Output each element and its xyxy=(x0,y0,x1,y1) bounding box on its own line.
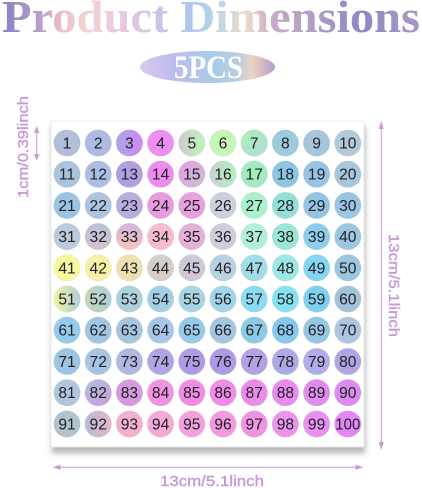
row 6: 56 xyxy=(214,292,232,308)
sticker diameter dimension: 1cm/0.39linch xyxy=(15,96,32,198)
row 7: 65 xyxy=(183,323,201,340)
row 10: 98 xyxy=(277,416,294,434)
row 3: 21 xyxy=(58,198,76,215)
row 5: 48 xyxy=(277,260,294,277)
row 9: 83 xyxy=(121,385,138,402)
row 9: 84 xyxy=(152,385,170,402)
row 2: 20 xyxy=(339,167,357,184)
row 3: 27 xyxy=(246,198,263,215)
row 7: 66 xyxy=(214,323,232,340)
row 2: 19 xyxy=(308,167,325,184)
row 4: 31 xyxy=(58,229,76,246)
row 4: 39 xyxy=(308,229,325,246)
row 3: 28 xyxy=(277,198,294,215)
row 6: 59 xyxy=(308,292,325,308)
row 8: 73 xyxy=(121,354,138,371)
row 1: 8 xyxy=(281,136,290,152)
row 3: 29 xyxy=(308,198,325,215)
row 6: 57 xyxy=(246,292,263,308)
row 8: 80 xyxy=(339,354,357,371)
row 4: 37 xyxy=(246,229,263,246)
row 5: 50 xyxy=(339,260,357,277)
row 9: 90 xyxy=(339,385,357,402)
row 6: 55 xyxy=(183,292,201,308)
row 4: 34 xyxy=(152,229,170,246)
row 2: 11 xyxy=(59,167,75,184)
row 7: 63 xyxy=(121,323,138,340)
row 5: 41 xyxy=(58,260,76,277)
row 8: 76 xyxy=(214,354,232,371)
row 8: 75 xyxy=(183,354,201,371)
row 9: 82 xyxy=(90,385,107,402)
row 10: 94 xyxy=(152,416,170,434)
row 6: 60 xyxy=(339,292,357,308)
row 10: 96 xyxy=(214,416,232,434)
row 5: 43 xyxy=(121,260,138,277)
row 2: 13 xyxy=(121,167,138,184)
row 8 xyxy=(54,348,361,375)
row 7: 61 xyxy=(58,323,76,340)
row 8: 79 xyxy=(308,354,325,371)
row 3: 22 xyxy=(90,198,107,215)
number stickers grid xyxy=(54,130,361,437)
row 6: 58 xyxy=(277,292,294,308)
row 2: 18 xyxy=(277,167,294,184)
row 1: 6 xyxy=(219,136,227,152)
row 8: 71 xyxy=(58,354,76,371)
row 10: 95 xyxy=(183,416,201,434)
row 2: 15 xyxy=(183,167,201,184)
height dimension xyxy=(379,121,402,450)
row 7: 68 xyxy=(277,323,294,340)
height dimension: 13cm/5.1linch xyxy=(385,234,402,337)
row 5 xyxy=(54,254,361,281)
row 10: 93 xyxy=(121,416,138,434)
row 8: 74 xyxy=(152,354,170,371)
row 5: 49 xyxy=(308,260,325,277)
row 3: 30 xyxy=(339,198,357,215)
row 4 xyxy=(54,223,361,250)
row 1: 1 xyxy=(63,136,71,152)
row 3: 24 xyxy=(152,198,170,215)
row 4: 32 xyxy=(90,229,107,246)
row 8: 78 xyxy=(277,354,294,371)
quantity badge: 5PCS xyxy=(140,50,275,86)
row 2 xyxy=(54,161,361,188)
row 1 xyxy=(54,130,361,156)
row 7: 69 xyxy=(308,323,325,340)
row 6: 54 xyxy=(152,292,170,308)
row 9: 81 xyxy=(58,385,76,402)
row 1: 7 xyxy=(250,136,259,152)
row 5: 46 xyxy=(214,260,232,277)
row 5: 45 xyxy=(183,260,201,277)
row 1: 10 xyxy=(339,136,357,152)
row 7: 62 xyxy=(90,323,107,340)
row 9: 85 xyxy=(183,385,201,402)
row 5: 47 xyxy=(246,260,263,277)
width dimension xyxy=(52,465,364,488)
row 8: 77 xyxy=(246,354,263,371)
row 2: 17 xyxy=(246,167,263,184)
row 8: 72 xyxy=(90,354,107,371)
row 4: 35 xyxy=(183,229,201,246)
quantity badge: 5PCS: 5PCS xyxy=(174,50,243,86)
row 3 xyxy=(54,192,361,219)
row 1: 9 xyxy=(312,136,321,152)
row 4: 40 xyxy=(339,229,357,246)
row 5: 44 xyxy=(152,260,170,277)
row 7: 70 xyxy=(339,323,357,340)
row 9: 86 xyxy=(214,385,232,402)
sticker diameter dimension xyxy=(15,96,39,198)
row 10: 100 xyxy=(335,416,361,434)
row 10 xyxy=(54,411,361,437)
row 1: 2 xyxy=(94,136,103,152)
sticker sheet xyxy=(51,121,364,447)
row 4: 36 xyxy=(214,229,232,246)
row 9: 87 xyxy=(246,385,263,402)
row 2: 12 xyxy=(90,167,107,184)
row 6: 53 xyxy=(121,292,138,308)
row 5: 42 xyxy=(90,260,107,277)
row 6: 51 xyxy=(58,292,76,308)
row 10: 91 xyxy=(58,416,76,434)
row 7: 64 xyxy=(152,323,170,340)
row 9: 89 xyxy=(308,385,325,402)
row 2: 14 xyxy=(152,167,170,184)
row 4: 33 xyxy=(121,229,138,246)
row 6: 52 xyxy=(90,292,107,308)
row 10: 97 xyxy=(246,416,263,434)
row 7: 67 xyxy=(246,323,263,340)
row 7 xyxy=(54,317,361,344)
row 1: 5 xyxy=(187,136,196,152)
row 6 xyxy=(54,286,361,312)
row 4: 38 xyxy=(277,229,294,246)
row 3: 23 xyxy=(121,198,138,215)
row 3: 25 xyxy=(183,198,201,215)
row 2: 16 xyxy=(214,167,232,184)
row 9 xyxy=(54,379,361,406)
row 9: 88 xyxy=(277,385,294,402)
row 1: 3 xyxy=(125,136,134,152)
row 1: 4 xyxy=(156,136,165,152)
row 10: 99 xyxy=(308,416,325,434)
row 10: 92 xyxy=(90,416,107,434)
row 3: 26 xyxy=(214,198,232,215)
